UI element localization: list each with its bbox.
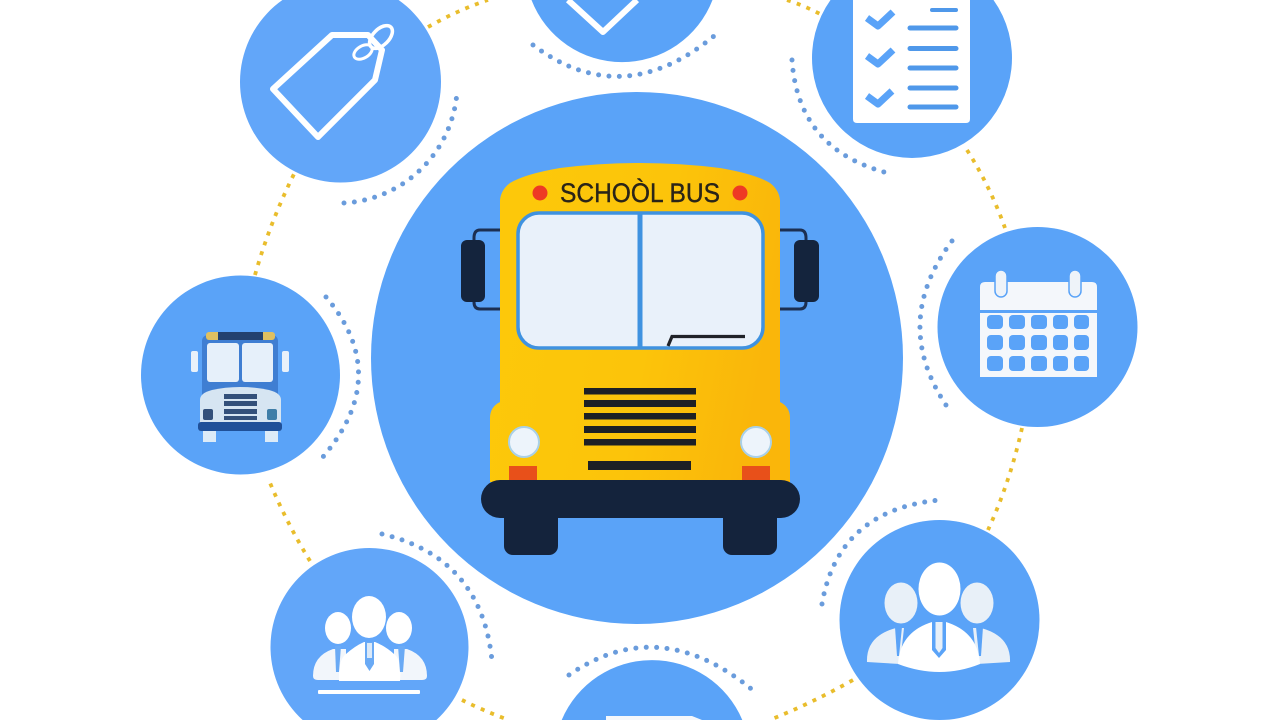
panel: top check: [532, 0, 712, 62]
red marker lights: [532, 186, 748, 200]
icon: people group: [867, 562, 1010, 672]
icon: calendar: [980, 270, 1097, 377]
windshield: [518, 213, 763, 348]
yellow dotted connector ring: [255, 0, 1022, 719]
wheels: [504, 505, 777, 555]
list lines: [910, 10, 956, 107]
windshield divider: [638, 213, 642, 348]
bus body: [490, 163, 790, 482]
panel: people right: [840, 520, 1040, 720]
central circle: [371, 92, 903, 624]
icon: document top edge: [606, 716, 702, 720]
panel: calendar: [938, 227, 1138, 427]
icon: check mark: [568, 0, 637, 32]
icon: checklist paper: [853, 0, 970, 123]
bumper: [481, 480, 800, 518]
right mirror: [794, 240, 819, 302]
icon: small bus: [191, 332, 289, 442]
orange indicators: [509, 466, 770, 480]
icon: tag: [273, 21, 397, 137]
panel: checklist: [812, 0, 1012, 158]
panel: small bus: [141, 276, 340, 474]
headlights: [509, 427, 771, 457]
wiper: [668, 336, 745, 346]
blue dotted arcs: [322, 36, 952, 692]
grille: [584, 388, 696, 470]
left mirror: [461, 240, 485, 302]
checks: [867, 12, 893, 104]
panel: people left: [270, 548, 469, 720]
school bus: [461, 163, 819, 555]
panel: bottom: [562, 660, 742, 720]
mirror arms: [474, 230, 806, 309]
panel: price tag: [240, 0, 441, 183]
icon: people group: [313, 596, 427, 694]
destination label: SCHOÒL BUS: [560, 177, 720, 208]
